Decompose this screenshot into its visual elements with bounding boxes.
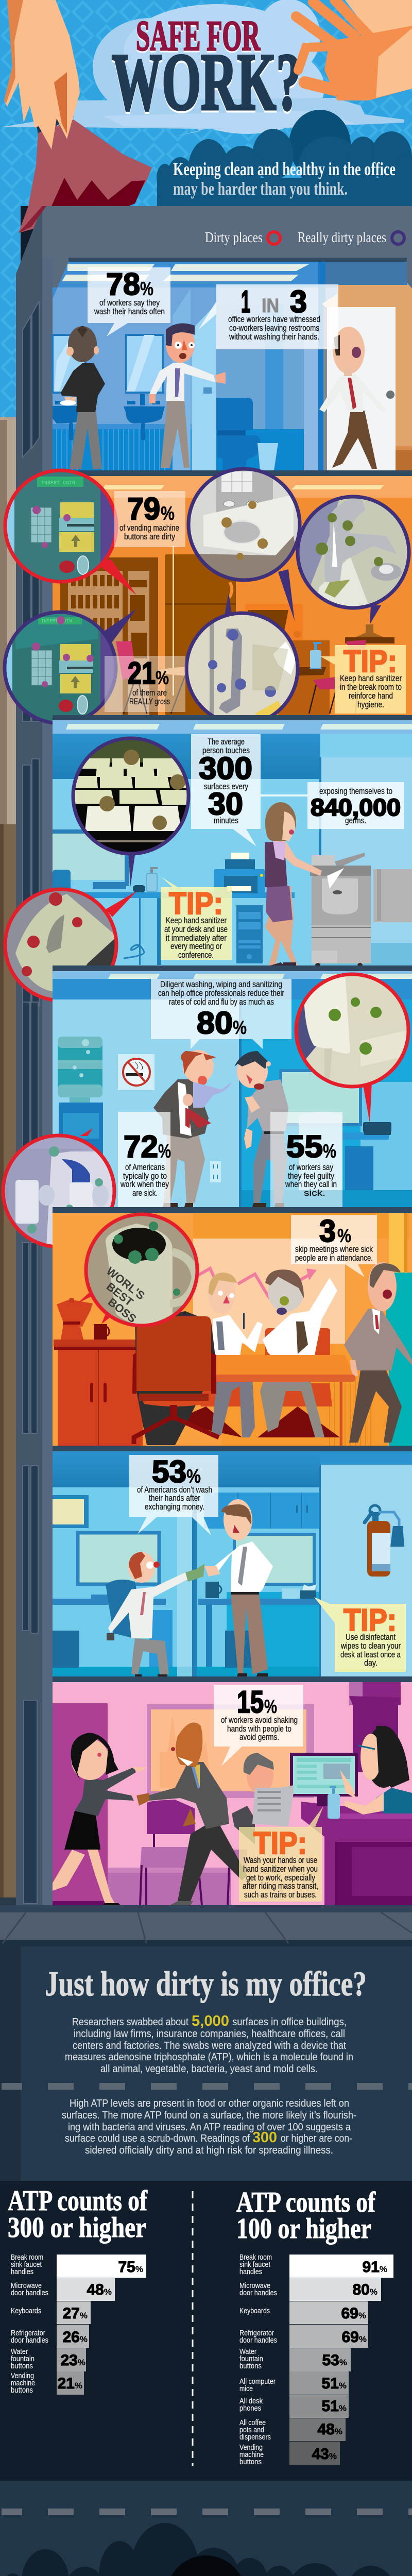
chart: ATP counts of 100 or higher [236, 2187, 393, 2466]
callout: 72%: % [158, 1141, 171, 1162]
labels 300: door handles [11, 2289, 48, 2297]
tip: hand sanitizer at desk: every meeting or [170, 941, 222, 951]
figure: woman shaking hands [53, 1733, 147, 1905]
callout: 72%: work when they [120, 1179, 169, 1189]
heading 300: ATP counts of [8, 2185, 148, 2217]
icon: left hand with duster [4, 0, 152, 233]
callout: 1 in 3: co-workers leaving restrooms [229, 323, 319, 333]
fridge [165, 546, 236, 715]
mirrors [53, 335, 163, 393]
callout: 79%: 79 [127, 492, 160, 526]
callout: 53%: their hands after [149, 1493, 200, 1503]
callout: 21% [105, 656, 185, 712]
reception desk [301, 1802, 412, 1905]
tip: hand sanitizer in break room [320, 644, 406, 714]
callout: 80%: Diligent washing, wiping and sanitizing [160, 979, 282, 989]
magnifier: coffee mug, dirty: BOSS [106, 1295, 139, 1325]
labels 100 [239, 2253, 277, 2466]
callout: 15%: % [264, 1696, 277, 1717]
subtitle: may be harder than you think. [173, 178, 348, 199]
values 300: 27% [63, 2305, 88, 2322]
figure: surprised man [149, 324, 226, 468]
paragraph: researchers: all animal, vegetable, bacteria, yeast and mold cells. [100, 2063, 318, 2075]
labels 100: door handles [239, 2289, 277, 2297]
callout: 300 surfaces every 30 minutes: The average [208, 737, 245, 747]
figure: angry man in suit [344, 1262, 412, 1443]
labels 100: buttons [239, 2362, 262, 2370]
callout: 79%: % [161, 503, 175, 524]
figure: man coughing [234, 1051, 288, 1207]
sky background [0, 0, 412, 422]
heading 100 [236, 2187, 376, 2245]
figure: sick man [260, 1269, 337, 1437]
paragraph: researchers: surfaces in office buildings, [232, 2016, 347, 2028]
callout: 55%: sick. [304, 1188, 325, 1198]
chart: ATP counts of 300 or higher [8, 2185, 148, 2395]
panel: break room [3, 467, 412, 727]
cabinets [203, 1487, 319, 1529]
figure: bald man leaving [319, 327, 387, 469]
callout: 79%: buttons are dirty [124, 532, 175, 541]
tip: hand sanitizer at desk: it immediately after [166, 933, 227, 943]
icon: coffee pot and mug [57, 1298, 109, 1340]
callout: 300 surfaces every 30 minutes: 300 [199, 751, 252, 786]
icon: wall outlets [210, 1161, 221, 1182]
magnifier: water cooler tap, dirty [2, 1128, 115, 1249]
connector between callouts [261, 794, 307, 796]
back chairs [170, 1328, 340, 1437]
wainscot [108, 1868, 231, 1905]
tip: wash hands at work [239, 1806, 323, 1902]
labels 100: sink faucet [239, 2260, 271, 2269]
callout: 300 surfaces every 30 minutes: surfaces every [204, 782, 248, 791]
callout: 3%: 3 [319, 1214, 336, 1248]
heading 300: 300 or higher [8, 2212, 146, 2244]
legend: Really dirty places [298, 230, 386, 246]
magnifier: vending machine buttons, really dirty [3, 609, 136, 726]
values 100 [312, 2259, 387, 2463]
icon: sanitizer on reception [328, 1786, 340, 1819]
callout: 55%: % [323, 1141, 336, 1162]
footer background [0, 2481, 412, 2576]
callout: 840,000 germs [307, 782, 404, 829]
paragraph: researchers: including law firms, insurance companies, healthcare offices, call [74, 2028, 345, 2040]
callout: 15%: avoid germs. [239, 1732, 279, 1742]
heading 300 [8, 2185, 148, 2244]
labels 100: buttons [239, 2458, 262, 2466]
callout: 72%: 72 [124, 1129, 158, 1164]
wainscot [53, 424, 310, 470]
callout: 72%: typically go to [123, 1171, 167, 1181]
paragraph: ATP levels: High ATP levels are present in food or other organic residues left on [70, 2098, 349, 2109]
lower wall slats [221, 1344, 389, 1446]
callout: 55%: of workers say [289, 1162, 333, 1172]
paragraph: researchers: measures adenosine triphosphate (ATP), which is a molecule found in [65, 2052, 353, 2063]
paragraph: ATP levels: sidered officially dirty and at high risk for spreading illness. [85, 2145, 333, 2156]
panel: meeting room [53, 1207, 412, 1446]
paragraph: ATP levels: ing with bacteria and viruses. An ATP reading of over 100 suggests a [68, 2122, 351, 2133]
partition glass [177, 1484, 197, 1676]
callout: 80%: rates of cold and flu by as much as [169, 997, 274, 1007]
dark storm cloud [157, 110, 412, 207]
values 300: 75% [118, 2259, 143, 2276]
right cubicle [239, 999, 412, 1207]
values 100: 43% [312, 2446, 337, 2463]
legend: Dirty places [205, 230, 263, 246]
callout: 55%: when they call in [285, 1179, 337, 1189]
labels 100: fountain [239, 2354, 263, 2363]
labels 100: phones [239, 2404, 261, 2413]
title: SAFE FOR [136, 12, 261, 59]
callout: 21%: REALLY gross [129, 697, 170, 706]
tip: hand sanitizer in break room: hygiene. [357, 700, 384, 709]
copier [310, 853, 412, 968]
paragraph: researchers: Researchers swabbed about [72, 2016, 188, 2028]
figure: receptionist [340, 1726, 412, 1815]
callout: 300 surfaces every 30 minutes [191, 734, 261, 846]
callout: 300 surfaces every 30 minutes: person touches [202, 745, 250, 755]
labels 300: Water [11, 2347, 28, 2356]
callout: 15%: 15 [237, 1685, 264, 1719]
callout: 300 surfaces every 30 minutes: minutes [214, 816, 238, 825]
meeting table [211, 1355, 355, 1446]
callout: 1 in 3: IN [262, 295, 279, 317]
magnifier: coffee mug, dirty [84, 1212, 199, 1329]
icon: right hand pinching [296, 0, 412, 100]
callout: 78%: wash their hands often [94, 307, 165, 316]
labels 300 [11, 2253, 48, 2395]
labels 300: Break room [11, 2253, 43, 2262]
callout: 3%: people are in attendance. [295, 1253, 373, 1263]
awning [0, 1905, 412, 1946]
panel: copy room [4, 715, 412, 1003]
back room [322, 258, 412, 470]
labels 100: All coffee [239, 2418, 266, 2427]
callout: 72%: of Americans [125, 1162, 165, 1172]
labels 300: Keyboards [11, 2307, 41, 2315]
heading 100: ATP counts of [236, 2187, 376, 2218]
callout: 80%: can help office professionals reduce their [158, 988, 284, 998]
icon: hand sanitizer bottle [310, 642, 322, 669]
tip: wash hands at work: get to work, especially [246, 1873, 315, 1883]
monitors [78, 1533, 314, 1584]
callout: 78% [88, 267, 170, 336]
callout: 53%: of Americans don’t wash [137, 1485, 212, 1495]
bars 100 [289, 2255, 393, 2465]
callout: 15% [214, 1685, 303, 1766]
labels 100: Keyboards [239, 2307, 270, 2315]
callout: 53%: exchanging money. [145, 1502, 204, 1512]
labels 100: All desk [239, 2397, 263, 2405]
callout: 840,000 germs: germs. [345, 816, 366, 825]
callout: 3%: % [337, 1225, 351, 1246]
callout: 80% [151, 979, 291, 1049]
callout: 15%: hands with people to [227, 1724, 291, 1734]
tip: hand sanitizer at desk: TIP: [169, 886, 223, 921]
tip: wash hands at work: hand sanitizer when you [243, 1864, 318, 1874]
desks [53, 1595, 319, 1668]
counter and sink [278, 624, 394, 715]
figure: man shaking hands [136, 1722, 247, 1905]
heading 100: 100 or higher [236, 2213, 371, 2245]
callout: 79%: of vending machine [119, 523, 179, 533]
chart divider [192, 2191, 194, 2466]
callout: 55% [270, 1112, 342, 1207]
table and chairs [116, 640, 366, 714]
column [349, 1682, 401, 1772]
values 100: 51% [321, 2398, 347, 2415]
coffee mug and tissues [205, 1582, 317, 1599]
callout: 80%: 80 [197, 1006, 233, 1040]
footer storm clouds [0, 2523, 412, 2576]
figure: seated man receiving money [106, 1552, 204, 1676]
arrow: pink trend line [198, 1268, 317, 1297]
desk and monitor [53, 829, 295, 965]
labels 300: machine [11, 2379, 35, 2387]
section: just how dirty is my office [0, 1946, 412, 2181]
tip: hand sanitizer at desk: Keep hand sanitizer [166, 916, 227, 925]
panel: money exchange [53, 1446, 412, 1676]
values 100: 48% [317, 2421, 342, 2438]
subtitle [173, 159, 396, 199]
values 100: 53% [322, 2352, 347, 2369]
vending machine [60, 557, 158, 715]
callout: 15%: of workers avoid shaking [221, 1715, 298, 1725]
values 300 [58, 2259, 143, 2392]
callout: 53% [129, 1454, 218, 1535]
labels 100: Refrigerator [239, 2329, 274, 2337]
paragraph: ATP levels: surface could use a scrub-down. Readings of [65, 2133, 250, 2144]
panel: restroom [53, 258, 412, 471]
labels 300: buttons [11, 2386, 33, 2395]
paragraph: ATP levels: surfaces. The more ATP found on a surface, the more likely it’s flourish- [62, 2110, 356, 2121]
labels 300: Vending [11, 2371, 34, 2380]
tip: hand sanitizer in break room: reinforce hand [349, 691, 393, 701]
labels 100: pots and [239, 2426, 264, 2434]
callout: 840,000 germs: 840,000 [311, 794, 401, 821]
tip: hand sanitizer in break room: TIP: [344, 644, 397, 679]
tip: wash hands at work: after riding mass transit, [243, 1881, 318, 1891]
callout: 80%: % [233, 1017, 247, 1038]
callout: 1 in 3 [198, 284, 338, 349]
paragraph: ATP levels: or higher are con- [281, 2133, 352, 2144]
labels 300: door handles [11, 2336, 48, 2345]
duster tail over building [19, 206, 46, 233]
magnifier: desk phone, dirty [294, 973, 410, 1135]
door [53, 1703, 108, 1905]
microwave [245, 604, 303, 640]
labels 100: Microwave [239, 2281, 270, 2290]
callout: 78%: 78 [106, 267, 140, 301]
callout: 3% [291, 1214, 377, 1277]
building facade [16, 206, 412, 1947]
magnifier: computer mouse, dirty [4, 888, 136, 1003]
callout: 840,000 germs: exposing themselves to [319, 786, 392, 796]
values 300: 26% [63, 2329, 88, 2346]
labels 100: machine [239, 2450, 264, 2459]
values 100: 69% [341, 2305, 366, 2322]
callout: 78%: % [140, 278, 153, 299]
road dashes [2, 2083, 412, 2090]
tip: wash hands at work: such as trains or buses. [244, 1890, 317, 1900]
magnifier: refrigerator door handle, really dirty [185, 592, 300, 727]
icon: no smoking sign [118, 1054, 154, 1090]
paragraph: ATP levels: 300 [252, 2129, 277, 2146]
values 100: 51% [321, 2375, 347, 2392]
callout: 53%: % [186, 1466, 201, 1487]
panel: sick colleagues [2, 965, 412, 1249]
paragraph: researchers: centers and factories. The swabs were analyzed with a device that [73, 2040, 346, 2052]
labels 100: Water [239, 2347, 256, 2356]
callout: 1 in 3: without washing their hands. [229, 332, 319, 342]
labels 100: Break room [239, 2253, 272, 2262]
figure: man washing from behind [60, 326, 105, 469]
right wall [319, 1465, 412, 1676]
paragraph: ATP levels [62, 2098, 356, 2156]
tip: wash hands at work: Wash your hands or use [244, 1855, 317, 1865]
magnifier: coffee mug, dirty: BEST [104, 1280, 136, 1309]
labels 100: All computer [239, 2377, 276, 2386]
callout: 53%: 53 [152, 1454, 186, 1489]
window with skyline [147, 1704, 314, 1798]
labels 300: Microwave [11, 2281, 42, 2290]
tip: disinfectant wipes [314, 1597, 406, 1672]
building left windows [23, 301, 39, 1904]
tip: disinfectant wipes: day. [364, 1658, 377, 1668]
labels 100: mice [239, 2384, 253, 2393]
magnifier: microwave door handle, really dirty [188, 467, 301, 621]
callout: 21%: 21 [128, 656, 156, 690]
waiting chairs [140, 1800, 247, 1905]
labels 300: buttons [11, 2362, 33, 2370]
foreground chair and man [132, 1311, 219, 1445]
panel: lobby [53, 1676, 412, 1905]
values 100: 69% [342, 2329, 367, 2346]
callout: 1 in 3: office workers have witnessed [228, 314, 320, 324]
paragraph: researchers [65, 2013, 353, 2075]
callout: 79% [114, 491, 185, 547]
callout: 78%: of workers say they [99, 298, 160, 308]
tip: wash hands at work: TIP: [253, 1826, 307, 1860]
values 100: 80% [352, 2281, 377, 2298]
water cooler [58, 1037, 103, 1207]
callout: 3%: skip meetings where sick [295, 1244, 373, 1254]
legend [205, 230, 404, 246]
figure: standing man giving money [204, 1499, 273, 1676]
title [112, 12, 301, 129]
callout: 21%: % [156, 667, 169, 688]
title: SAFE FOR [136, 13, 261, 61]
values 100: 91% [363, 2259, 387, 2276]
title: WORK? [112, 37, 301, 127]
callout: 55%: they feel guilty [288, 1171, 334, 1181]
figure: woman at copier [265, 802, 322, 965]
tip: hand sanitizer at desk [161, 877, 232, 960]
magnifier: vending machine buttons, dirty [4, 469, 136, 595]
icon: sanitizer bottle on desk [147, 867, 158, 891]
labels 300: fountain [11, 2354, 35, 2363]
callout: 1 in 3: 1 [241, 284, 250, 319]
values 300: 21% [58, 2375, 82, 2392]
cabinet [54, 1340, 144, 1446]
values 300: 48% [87, 2281, 112, 2298]
callout: 72%: are sick. [132, 1188, 158, 1198]
magnifier: coffee mug, dirty: WORL'S [104, 1264, 147, 1302]
magnifier: keyboard, really dirty [71, 737, 191, 887]
printer and tower [214, 853, 265, 963]
tip: disinfectant wipes: TIP: [344, 1603, 397, 1637]
paragraph: researchers: 5,000 [192, 2013, 229, 2029]
callout: 72% [118, 1112, 171, 1207]
labels 100: dispensers [239, 2433, 271, 2442]
callout: 300 surfaces every 30 minutes: 30 [208, 787, 243, 821]
picture frame [53, 1495, 89, 1528]
figure: man sneezing into handkerchief [153, 1050, 232, 1207]
light cloud behind title [0, 0, 404, 137]
stall and toilet [173, 262, 325, 470]
magnifier: sink faucet, really dirty [297, 496, 410, 624]
right wall panel [319, 757, 412, 965]
figure: blond man [208, 1273, 263, 1437]
labels 100: Vending [239, 2443, 263, 2452]
labels 300: sink faucet [11, 2260, 42, 2269]
labels 300: handles [11, 2267, 33, 2276]
callout: 21%: of them are [132, 688, 167, 698]
bars 300 [57, 2255, 146, 2395]
ceiling [53, 262, 325, 299]
labels 300: Refrigerator [11, 2329, 45, 2337]
magnifier: vending machine buttons, really dirty: INSERT COIN [41, 619, 72, 624]
magnifier tails [77, 1293, 111, 1324]
outside left wall [0, 417, 16, 1906]
tip: hand sanitizer at desk: at your desk and use [164, 924, 228, 934]
values 300: 23% [61, 2352, 85, 2369]
figure: seated man with newspaper [232, 1753, 294, 1844]
icon: fire extinguisher [365, 1505, 404, 1577]
section: ATP charts [0, 2181, 412, 2481]
labels 100: door handles [239, 2336, 277, 2345]
tip: hand sanitizer at desk: conference. [178, 950, 214, 960]
sinks [53, 394, 165, 440]
labels 100: handles [239, 2267, 262, 2276]
upper corner wall [53, 258, 68, 299]
monitor [290, 1753, 358, 1806]
callout: 1 in 3: 3 [290, 284, 307, 319]
title: WORK? [112, 39, 301, 129]
magnifier: vending machine buttons, dirty: INSERT COIN [41, 481, 75, 486]
tip: disinfectant wipes: Use disinfectant [346, 1632, 396, 1642]
callout: 55%: 55 [286, 1129, 323, 1164]
